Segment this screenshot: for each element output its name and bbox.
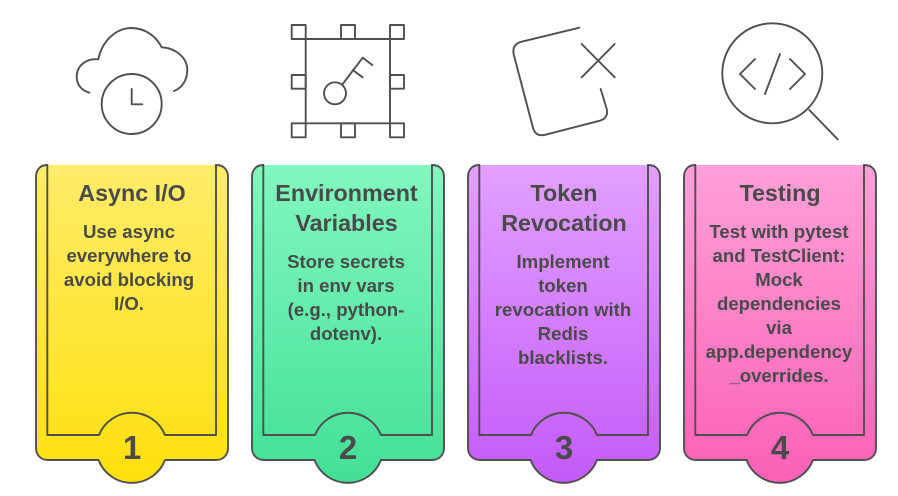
- number: 3: 3: [555, 429, 573, 466]
- heading: Token Revocation: Token: [531, 180, 597, 206]
- number: 4: 4: [771, 429, 790, 466]
- heading: Token Revocation: [501, 180, 627, 236]
- text: Token Revocation description: revocation with: [495, 299, 631, 320]
- icon: cloud with clock: [77, 28, 187, 134]
- text: Testing description: Test with pytest: [709, 221, 849, 242]
- icon: revoked token card with cross: [513, 28, 615, 135]
- text: Token Revocation description: Redis: [538, 323, 588, 344]
- heading: Environment Variables: Variables: [295, 210, 398, 236]
- text: Environment Variables description: in env vars: [297, 275, 395, 296]
- text: Token Revocation description: [495, 251, 631, 368]
- number: 2: 2: [339, 429, 357, 466]
- panel: Token Revocation: [468, 165, 660, 483]
- text: Token Revocation description: blacklists.: [518, 347, 608, 368]
- heading: Token Revocation: Revocation: [501, 210, 627, 236]
- text: Testing description: dependencies: [717, 293, 841, 314]
- text: Token Revocation description: Implement: [516, 251, 610, 272]
- text: Testing description: app.dependency: [706, 341, 853, 362]
- text: Async I/O description: Use async: [83, 221, 175, 242]
- text: Async I/O description: [64, 221, 194, 314]
- text: Environment Variables description: [287, 251, 405, 344]
- text: Token Revocation description: token: [538, 275, 588, 296]
- text: Environment Variables description: (e.g., python-: [288, 299, 404, 320]
- text: Async I/O description: everywhere to: [66, 245, 192, 266]
- panel: Async I/O: [36, 165, 228, 483]
- text: Testing description: _overrides.: [728, 365, 829, 386]
- text: Async I/O description: avoid blocking: [64, 269, 194, 290]
- heading: Environment Variables: [275, 180, 418, 236]
- text: Environment Variables description: Store secrets: [287, 251, 405, 272]
- icon: key in a selection frame: [292, 25, 404, 137]
- panel: Testing: [684, 165, 876, 483]
- text: Testing description: Mock: [755, 269, 803, 290]
- text: Async I/O description: I/O.: [114, 293, 144, 314]
- text: Testing description: and TestClient:: [713, 245, 845, 266]
- text: Testing description: via: [766, 317, 793, 338]
- panel: Environment Variables: [252, 165, 444, 483]
- icon: magnifier with code brackets: [722, 23, 838, 139]
- number: 1: 1: [123, 429, 141, 466]
- heading: Environment Variables: Environment: [275, 180, 418, 206]
- text: Environment Variables description: dotenv).: [310, 323, 382, 344]
- text: Testing description: [706, 221, 853, 386]
- heading: Testing: Testing: [739, 180, 821, 206]
- heading: Async I/O: Async I/O: [78, 180, 186, 206]
